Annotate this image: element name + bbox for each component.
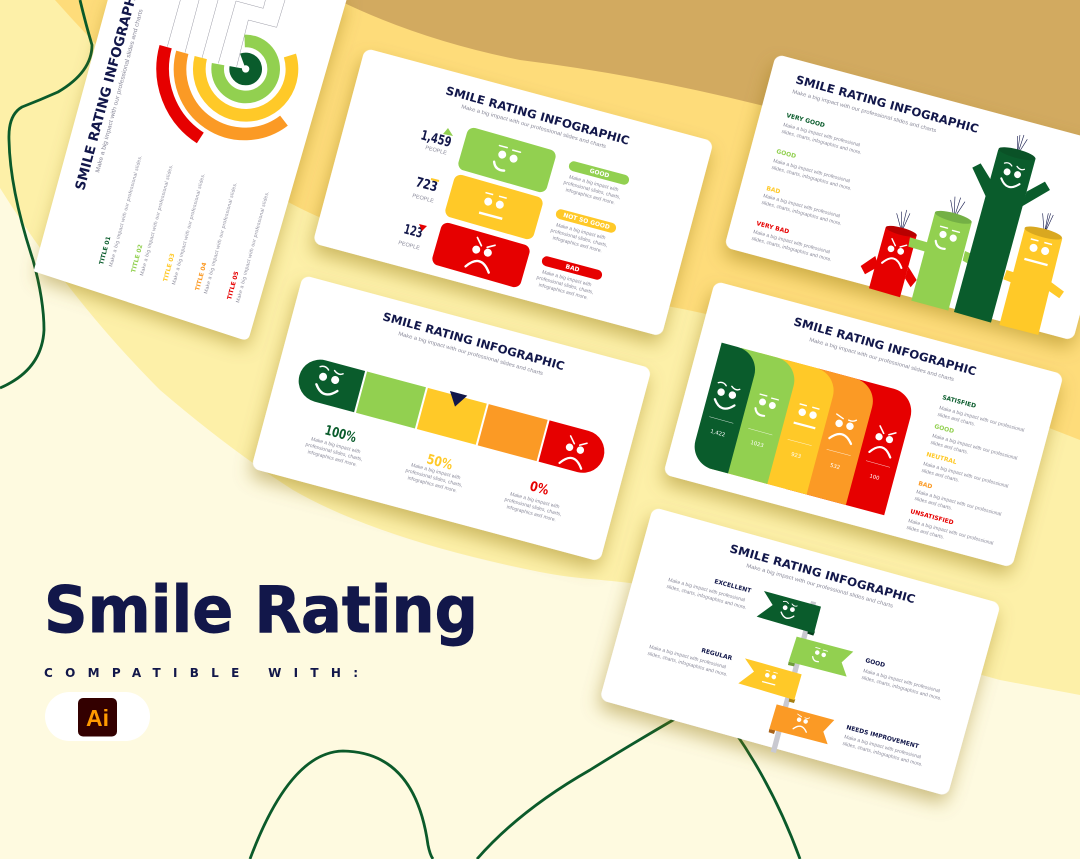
good note: slides, charts, infographics and more. <box>861 675 942 702</box>
flag: needs improvement <box>769 704 834 744</box>
item list: Make a big impact with our professional slides. <box>235 191 271 304</box>
0 percent note <box>502 478 564 524</box>
neutral face block <box>444 173 544 241</box>
signpost <box>738 591 853 752</box>
item list: TITLE 01 <box>98 236 112 266</box>
heading: SMILE RATING INFOGRAPHIC <box>444 83 631 148</box>
legend: Make a big impact with professional <box>782 122 861 148</box>
flag: regular <box>738 658 802 703</box>
legend: Make a big impact with professional <box>752 229 831 255</box>
subtitle: Make a big impact with our professional slides and charts <box>745 563 894 610</box>
counts: PEOPLE <box>397 240 421 252</box>
excellent note: Make a big impact with professional <box>667 577 746 603</box>
excellent note: slides, charts, infographics and more. <box>666 584 747 611</box>
legend: Make a big impact with professional <box>772 158 851 184</box>
icon: Adobe Illustrator badge: Ai <box>86 705 109 731</box>
regular note: REGULAR <box>700 647 733 662</box>
bad label <box>534 255 603 302</box>
regular note: slides, charts, infographics and more. <box>647 651 728 678</box>
50 percent note <box>403 451 465 495</box>
good note <box>861 657 944 702</box>
icon: Adobe Illustrator badge <box>45 692 150 741</box>
flag: excellent <box>757 591 821 636</box>
subtitle: Make a big impact with our professional slides and charts <box>95 9 145 174</box>
subtitle: Make a big impact with our professional slides and charts <box>791 89 937 134</box>
50 percent note: professional slides, charts, <box>405 468 463 489</box>
legend: slides and charts. <box>906 525 945 541</box>
heading: SMILE RATING INFOGRAPHIC <box>794 72 980 136</box>
legend: UNSATISFIED <box>909 508 954 526</box>
legend: slides and charts. <box>937 412 976 428</box>
legend: GOOD <box>933 423 955 435</box>
column chart: 923 <box>790 452 802 460</box>
panel: signpost slide <box>600 507 1001 796</box>
good label: infographics and more. <box>565 187 616 206</box>
excellent note: EXCELLENT <box>713 578 753 595</box>
100 percent note: 100% <box>323 422 358 446</box>
not so good label: professional slides, charts, <box>550 228 608 249</box>
bad label: professional slides, charts, <box>536 275 594 296</box>
legend: Make a big impact with our professional <box>915 489 1002 518</box>
legend: Make a big impact with our professional <box>922 461 1009 490</box>
not so good label: NOT SO GOOD <box>562 212 610 231</box>
0 percent note: infographics and more. <box>506 504 557 523</box>
column chart: 1,422 <box>709 429 726 439</box>
good label: Make a big impact with <box>568 174 619 193</box>
item list: TITLE 03 <box>162 253 176 283</box>
legend: NEUTRAL <box>925 451 958 466</box>
column chart: 100 <box>869 473 881 482</box>
counts: 1,459 <box>419 127 453 151</box>
item list <box>98 155 271 304</box>
legend: SATISFIED <box>941 394 977 410</box>
flag: good <box>788 637 853 677</box>
legend: slides, charts, infographics and more. <box>781 129 862 156</box>
50 percent note: infographics and more. <box>407 475 458 494</box>
legend: VERY GOOD <box>785 112 826 129</box>
counts: 123 <box>402 221 424 242</box>
good note: GOOD <box>864 657 886 669</box>
good label <box>561 160 630 207</box>
icon: pointer <box>450 391 467 407</box>
legend: slides and charts. <box>921 468 960 484</box>
good label: professional slides, charts, <box>563 180 621 201</box>
icon: happy face <box>314 365 344 397</box>
panel: concentric arcs slide <box>36 0 345 338</box>
legend: slides, charts, infographics and more. <box>751 236 832 263</box>
panel: characters slide <box>724 54 1080 341</box>
0 percent note: 0% <box>528 478 551 499</box>
background: tan wave <box>338 0 1080 190</box>
legend: slides and charts. <box>930 440 969 456</box>
item list: TITLE 02 <box>130 244 144 274</box>
legend: Make a big impact with professional <box>762 193 841 219</box>
bad face block <box>431 221 531 289</box>
legend: slides and charts. <box>914 496 953 512</box>
heading: SMILE RATING INFOGRAPHIC <box>728 541 917 606</box>
panel: rating scale slide <box>251 275 652 562</box>
column chart: 532 <box>829 463 841 471</box>
100 percent note: Make a big impact with <box>310 436 361 455</box>
not so good label: infographics and more. <box>552 235 603 254</box>
bad label: BAD <box>565 263 580 274</box>
decorative green curve: top left <box>0 0 92 388</box>
item list: TITLE 04 <box>194 262 208 292</box>
0 percent note: Make a big impact with <box>509 491 560 510</box>
item list: Make a big impact with our professional slides. <box>139 164 175 277</box>
not so good label: Make a big impact with <box>555 222 606 241</box>
character figures <box>861 135 1064 335</box>
legend <box>906 394 1025 553</box>
panel: columns slide <box>663 281 1064 568</box>
icon: angry face <box>560 435 589 469</box>
legend: BAD <box>765 185 781 196</box>
not so good label <box>548 208 617 255</box>
decorative green curve: bottom <box>250 716 800 859</box>
subtitle: Make a big impact with our professional slides and charts <box>460 104 607 150</box>
100 percent note <box>303 422 365 469</box>
counts <box>397 127 453 252</box>
needs improvement note: slides, charts, infographics and more. <box>842 741 923 768</box>
good label: GOOD <box>589 168 610 180</box>
bad label: Make a big impact with <box>541 269 592 288</box>
legend: BAD <box>917 480 933 491</box>
background: golden wave <box>55 0 1080 440</box>
item list: TITLE 05 <box>226 271 240 301</box>
item list: Make a big impact with our professional slides. <box>108 155 144 268</box>
100 percent note: infographics and more. <box>307 449 358 468</box>
heading: SMILE RATING INFOGRAPHIC <box>792 314 978 378</box>
50 percent note: 50% <box>425 451 455 474</box>
good face block <box>457 126 557 194</box>
legend: slides, charts, infographics and more. <box>761 200 842 227</box>
column chart <box>689 343 916 515</box>
needs improvement note <box>842 724 925 768</box>
0 percent note: professional slides, charts, <box>504 497 562 518</box>
bad label: infographics and more. <box>538 282 589 301</box>
legend: Make a big impact with our professional <box>931 433 1018 462</box>
rating bar <box>294 355 609 478</box>
radial chart <box>163 0 292 138</box>
legend: VERY BAD <box>755 220 790 236</box>
subtitle: Make a big impact with our professional slides and charts <box>808 337 955 383</box>
legend: Make a big impact with our professional <box>938 405 1025 434</box>
legend: GOOD <box>775 148 797 160</box>
counts: 723 <box>414 174 439 196</box>
main heading: Smile Rating <box>44 574 478 648</box>
100 percent note: professional slides, charts, <box>305 442 363 463</box>
item list: Make a big impact with our professional slides. <box>171 173 207 286</box>
good note: Make a big impact with professional <box>862 668 941 694</box>
regular note: Make a big impact with professional <box>648 644 727 670</box>
legend <box>751 112 864 263</box>
counts: PEOPLE <box>411 193 435 205</box>
needs improvement note: Make a big impact with professional <box>843 734 922 760</box>
column chart: 1023 <box>750 440 764 449</box>
counts: PEOPLE <box>424 145 448 157</box>
50 percent note: Make a big impact with <box>410 462 461 481</box>
legend: Make a big impact with our professional <box>907 518 994 547</box>
subtitle: Make a big impact with our professional slides and charts <box>397 331 544 377</box>
needs improvement note: NEEDS IMPROVEMENT <box>845 724 920 750</box>
item list: Make a big impact with our professional slides. <box>203 182 239 295</box>
heading: SMILE RATING INFOGRAPHIC <box>381 309 566 373</box>
panel: stacked faces slide <box>313 48 714 337</box>
compatible with label: COMPATIBLE WITH: <box>44 666 358 680</box>
legend: slides, charts, infographics and more. <box>771 165 852 192</box>
